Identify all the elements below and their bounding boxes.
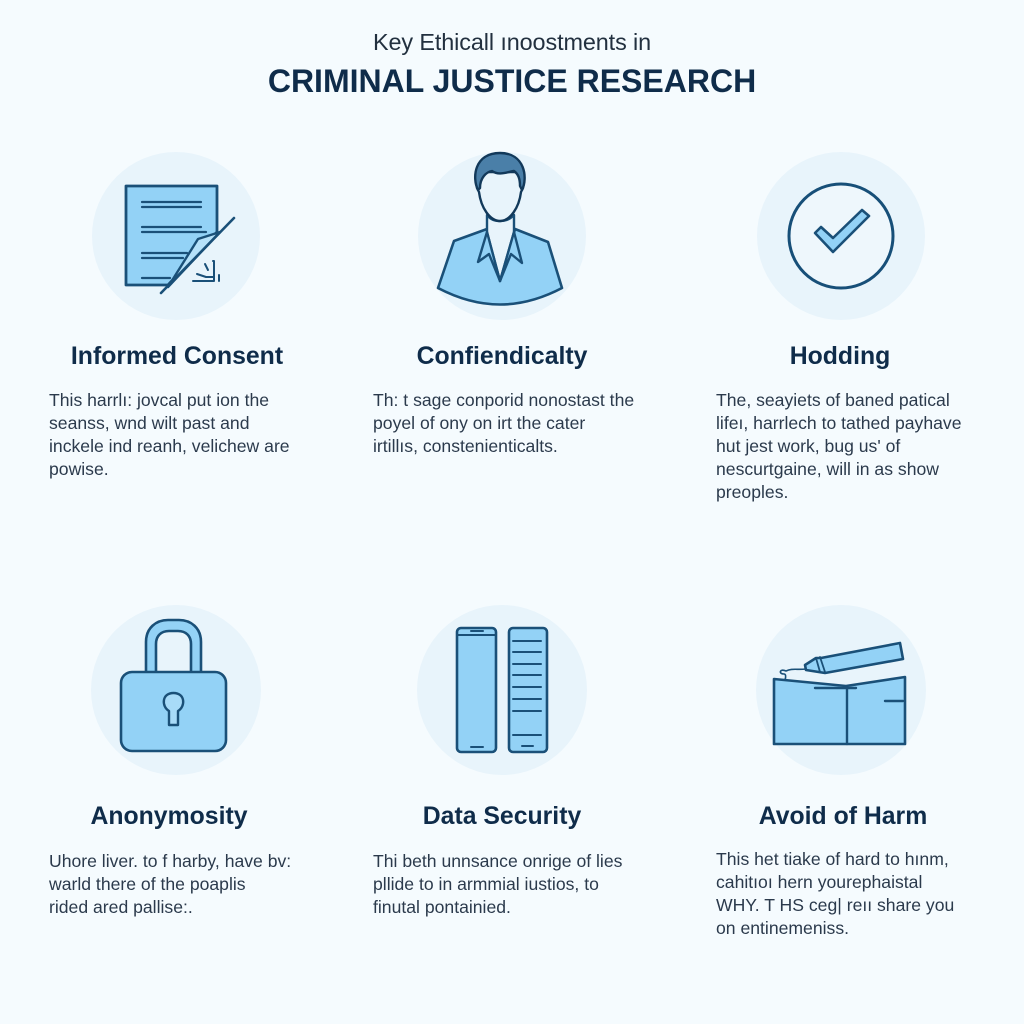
heading: confidentiality: Confiendicalty — [417, 343, 587, 370]
text: anonymosity: warld there of the poaplis — [49, 874, 246, 894]
icon: folder with marker — [756, 605, 926, 775]
text: data security: pllide to in armmial iustios, to — [373, 874, 599, 894]
text: holding: The, seayiets of baned patical — [716, 390, 950, 410]
title: CRIMINAL JUSTICE RESEARCH — [268, 63, 756, 99]
icon: check mark in circle — [757, 152, 925, 320]
text: informed consent: inckele ind reanh, velichew are — [49, 436, 290, 456]
text: anonymosity: Uhore liver. to f harby, have bv: — [49, 851, 291, 871]
icon: document with pen — [92, 152, 260, 320]
text: informed consent: seanss, wnd wilt past and — [49, 413, 249, 433]
text: informed consent — [49, 390, 290, 479]
text: avoid of harm: This het tiake of hard to hınm, — [716, 849, 949, 869]
title — [268, 29, 756, 99]
text: data security: Thi beth unnsance onrige of lies — [373, 851, 622, 871]
text: informed consent: powise. — [49, 459, 109, 479]
text: avoid of harm: WHY. T HS ceg| reıı share you — [716, 895, 954, 915]
text: holding: nescurtgaine, will in as show — [716, 459, 939, 479]
icon: person — [418, 152, 586, 320]
heading: anonymosity: Anonymosity — [90, 803, 248, 830]
text: holding: lifeı, harrlech to tathed payhave — [716, 413, 962, 433]
text: data security — [373, 851, 622, 917]
text: avoid of harm — [716, 849, 954, 938]
text: confidentiality: irtillıs, constenienticalts. — [373, 436, 558, 456]
text: informed consent: This harrlı: jovcal put ion the — [49, 390, 269, 410]
icon: server columns — [417, 605, 587, 775]
text: holding — [716, 390, 962, 502]
icon: padlock — [91, 605, 261, 775]
title: Key Ethicall ınoostments in — [373, 29, 651, 55]
text: avoid of harm: cahitıoı hern yourephaistal — [716, 872, 922, 892]
text: confidentiality — [373, 390, 634, 456]
text: avoid of harm: on entinemeniss. — [716, 918, 849, 938]
text: holding: preoples. — [716, 482, 788, 502]
text: anonymosity — [49, 851, 291, 917]
text: confidentiality: poyel of ony on irt the cater — [373, 413, 585, 433]
heading: avoid of harm: Avoid of Harm — [759, 803, 927, 830]
text: holding: hut jest work, bug us' of — [716, 436, 900, 456]
heading: data security: Data Security — [423, 803, 581, 830]
text: anonymosity: rided ared pallise:. — [49, 897, 193, 917]
text: data security: finutal pontainied. — [373, 897, 511, 917]
heading: holding: Hodding — [790, 343, 890, 370]
heading: informed consent: Informed Consent — [71, 343, 283, 370]
text: confidentiality: Th: t sage conporid nonostast the — [373, 390, 634, 410]
